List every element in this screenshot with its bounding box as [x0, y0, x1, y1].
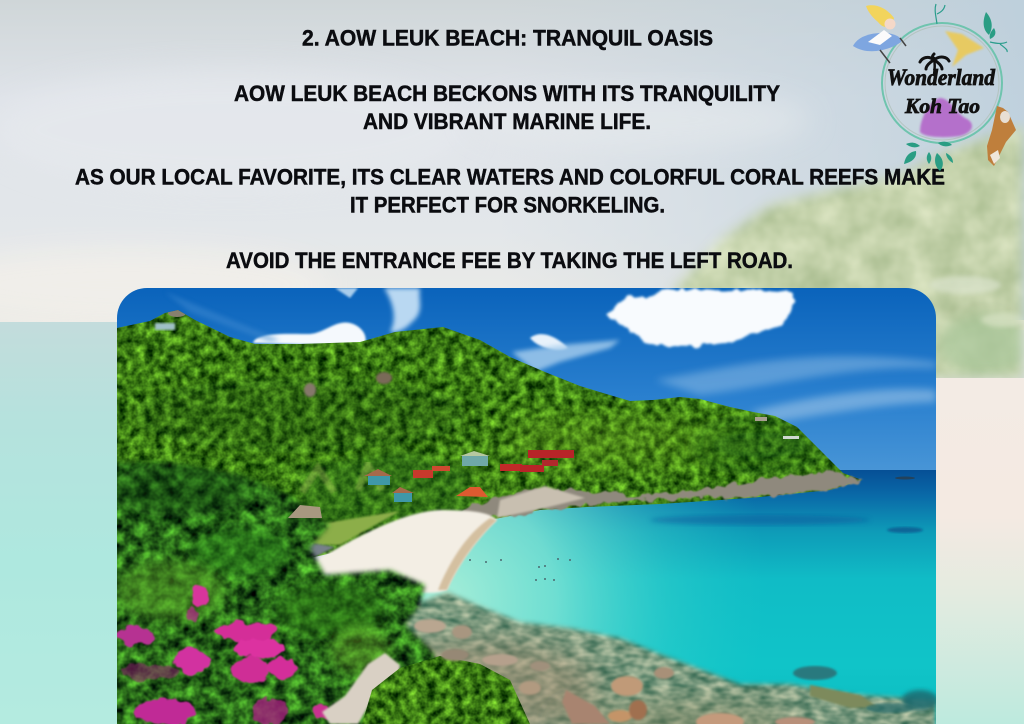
clouds — [165, 288, 936, 422]
purple watercolor — [920, 98, 972, 137]
logo ring — [882, 23, 1002, 143]
main photo: Aow Leuk beach — [110, 288, 940, 724]
photo sky — [117, 288, 936, 488]
background foliage — [660, 120, 1024, 385]
logo wordmark: Wonderland — [887, 65, 995, 90]
beach — [300, 510, 497, 593]
logo subtitle: Koh Tao — [904, 94, 980, 118]
teal leaves — [904, 12, 995, 171]
shoreline rocks — [458, 472, 863, 518]
foreground canopy — [110, 450, 455, 724]
resort huts and palms — [288, 450, 574, 518]
rabbit figure — [987, 106, 1016, 166]
favorite line 2: IT PERFECT FOR SNORKELING. — [350, 192, 665, 218]
teal sprigs — [935, 4, 1007, 52]
tip line: AVOID THE ENTRANCE FEE BY TAKING THE LEFT ROAD. — [226, 248, 793, 273]
bougainvillea flowers — [117, 585, 332, 724]
granite boulder — [322, 653, 400, 724]
intro line 2: AND VIBRANT MARINE LIFE. — [363, 109, 651, 134]
shore boulders — [414, 619, 815, 724]
hillside — [117, 310, 862, 557]
yellow watercolor — [945, 31, 984, 67]
reef and seabed — [404, 590, 936, 724]
swimmers — [469, 558, 571, 581]
background sand — [936, 378, 1024, 724]
sea — [380, 470, 936, 724]
heading: 2. AOW LEUK BEACH: TRANQUIL OASIS — [302, 26, 713, 50]
front bush — [362, 656, 530, 724]
palm icon — [920, 54, 949, 75]
text block — [75, 26, 945, 273]
logo: Wonderland Koh Tao — [853, 4, 1016, 171]
intro line 1: AOW LEUK BEACH BECKONS WITH ITS TRANQUILITY — [234, 81, 780, 106]
favorite line 1: AS OUR LOCAL FAVORITE, ITS CLEAR WATERS AND COLORFUL CORAL REEFS MAKE — [75, 164, 945, 190]
Alice figure — [853, 5, 906, 63]
